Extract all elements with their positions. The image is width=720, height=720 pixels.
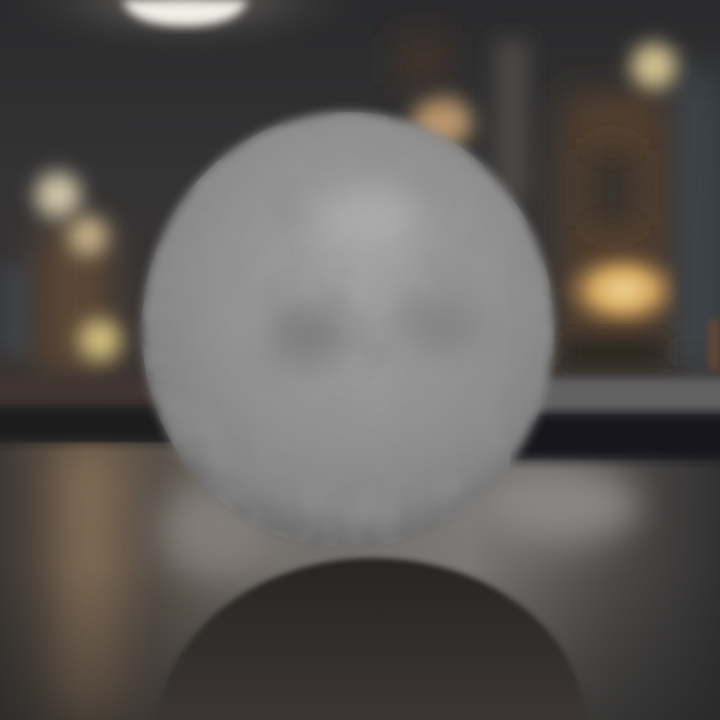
glow behind sphere	[400, 35, 472, 148]
right shelf with warm lights	[545, 43, 720, 370]
ceiling light	[0, 0, 380, 120]
floor	[0, 442, 720, 720]
silver sphere	[142, 112, 554, 548]
left ledge	[0, 378, 190, 442]
sphere surface texture	[142, 112, 554, 548]
right ledge	[510, 378, 720, 460]
left shelf with lights	[35, 172, 121, 375]
dark foreground sphere	[156, 558, 588, 720]
